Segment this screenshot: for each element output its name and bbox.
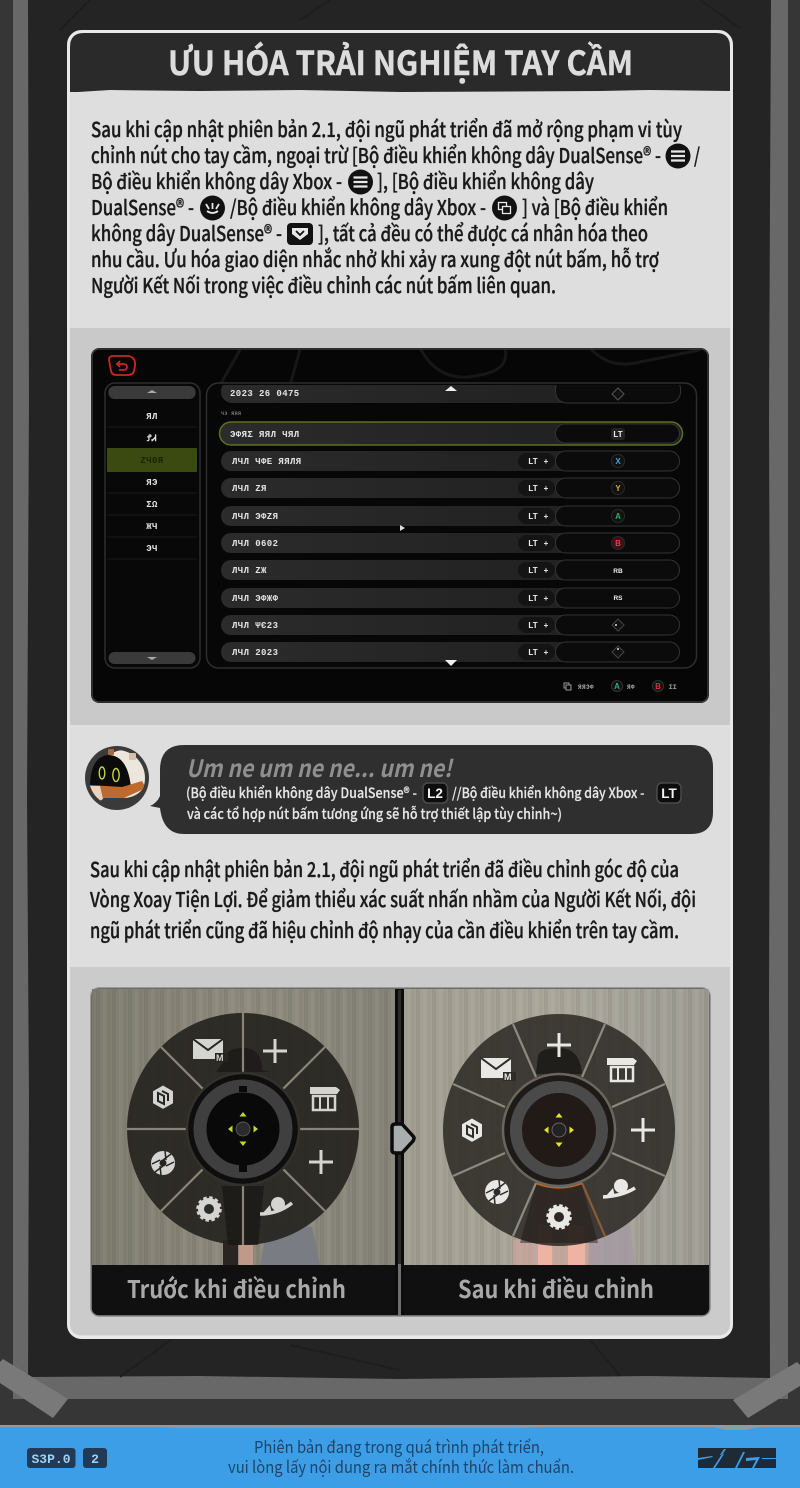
main card — [68, 32, 732, 1338]
icon: view button — [492, 196, 517, 220]
callout: speech bubble: và các tổ hợp nút bấm tương ứng sẽ hỗ trợ thiết lập tùy chỉnh~) — [187, 804, 562, 824]
row RB: RB — [613, 568, 623, 575]
row partially hidden: 2023 26 0475 — [230, 389, 300, 399]
icon: create button — [200, 196, 225, 220]
row dpad up: ЛЧЛ 2023 — [232, 648, 278, 658]
icon: shutter — [485, 1180, 509, 1204]
callout: speech bubble — [150, 745, 713, 834]
icon: back button — [109, 356, 135, 375]
selected row: LT — [613, 430, 623, 439]
left menu — [105, 383, 200, 668]
left menu: ЯЛ — [146, 412, 158, 422]
icon: shutter — [151, 1151, 175, 1175]
intro paragraph: ], [Bộ điều khiển không dây — [377, 165, 594, 195]
icon: touchpad button — [287, 223, 313, 245]
caption: after: Sau khi điều chỉnh — [458, 1270, 654, 1305]
panel: screenshot section — [70, 328, 730, 725]
intro paragraph: / — [694, 139, 700, 169]
disclaimer: vui lòng lấy nội dung ra mắt chính thức làm chuẩn. — [228, 1454, 574, 1478]
row A: A — [615, 512, 621, 521]
row dpad left — [221, 615, 680, 635]
row X: ЛЧЛ ЧФЕ ЯЯЛЯ — [232, 457, 302, 467]
intro paragraph — [91, 113, 700, 299]
left menu: ЯЭ — [146, 478, 158, 488]
row X: X — [615, 457, 621, 466]
icon: gear — [198, 1198, 220, 1220]
row A — [221, 506, 680, 526]
intro paragraph: nhu cầu. Ưu hóa giao diện nhắc nhở khi xảy ra xung đột nút bấm, hỗ trợ — [91, 243, 659, 273]
arrow: scroll up — [445, 386, 457, 391]
logo: ZZZ — [698, 1448, 776, 1468]
footer hints: B — [655, 682, 661, 691]
icon: mail: M — [216, 1053, 224, 1063]
footer hints: ΣΣ — [669, 684, 677, 691]
selected row: ЭФЯΣ ЯЯЛ ЧЯЛ — [230, 430, 300, 440]
icon: options button — [666, 144, 690, 168]
row B: LT — [528, 539, 538, 548]
icon: LT chip — [657, 783, 681, 803]
icon: store — [310, 1087, 340, 1110]
row X: LT — [528, 457, 538, 466]
left menu: ꝬᏗ — [146, 433, 157, 444]
wheel: before — [92, 989, 396, 1265]
binding list — [206, 378, 696, 668]
row dpad up: + — [544, 648, 549, 657]
screenshot: controller settings — [91, 348, 709, 703]
disclaimer: Phiên bản đang trong quá trình phát triển, — [254, 1434, 544, 1458]
icon: plus — [547, 1033, 571, 1057]
wheel: after — [404, 989, 709, 1265]
row Y: + — [544, 484, 549, 493]
icon: LT chip: LT — [661, 786, 677, 801]
icon: store — [607, 1058, 637, 1081]
row B: B — [615, 539, 621, 548]
row RS: + — [544, 594, 549, 603]
footer hints — [564, 680, 677, 692]
icon: plus — [309, 1150, 333, 1174]
footer band — [0, 1425, 800, 1488]
divider — [395, 989, 404, 1315]
row B: ЛЧЛ 0602 — [232, 539, 278, 549]
badge: version — [27, 1448, 76, 1468]
icon: L2 chip — [423, 783, 448, 803]
row RS — [221, 588, 680, 608]
header bar — [70, 33, 730, 92]
footer hints: ЯЯЭФ — [578, 684, 594, 691]
row B: + — [544, 539, 549, 548]
corner tape right — [733, 1362, 800, 1418]
badge: number: 2 — [91, 1452, 99, 1467]
icon: mail — [481, 1058, 516, 1082]
icon: hexagon — [462, 1118, 482, 1142]
intro paragraph: Sau khi cập nhật phiên bản 2.1, đội ngũ phát triển đã mở rộng phạm vi tùy — [91, 113, 682, 143]
row X — [221, 451, 680, 471]
row RS: ЛЧЛ ЭФЖФ — [232, 594, 279, 604]
callout: speech bubble: (Bộ điều khiển không dây DualSense® - — [186, 783, 417, 803]
selected row — [220, 422, 682, 445]
row B — [221, 533, 680, 553]
row RB: LT — [528, 566, 538, 575]
icon: menu button — [348, 170, 373, 194]
disclaimer — [228, 1434, 574, 1478]
arrow: before to after — [392, 1124, 414, 1153]
row dpad up: LT — [528, 648, 538, 657]
title: ƯU HÓA TRẢI NGHIỆM TAY CẦM — [168, 37, 633, 85]
intro paragraph: không dây DualSense® - — [91, 217, 282, 247]
badge: version: S3P.0 — [32, 1452, 71, 1467]
icon: mail: M — [504, 1072, 512, 1082]
left menu: ЭЧ — [146, 544, 158, 554]
row dpad up — [221, 642, 680, 662]
row RB: ЛЧЛ ZЖ — [232, 566, 267, 576]
intro paragraph: DualSense® - — [91, 191, 194, 221]
icon: planet — [603, 1179, 635, 1197]
row partially hidden — [221, 385, 681, 404]
row X: + — [544, 457, 549, 466]
row dpad left: ЛЧЛ ΨЄ23 — [232, 621, 278, 631]
row dpad left: + — [544, 621, 549, 630]
row A: ЛЧЛ ЭФZЯ — [232, 512, 278, 522]
second paragraph: ngũ phát triển cũng đã hiệu chỉnh độ nhạy của cần điều khiển trên tay cầm. — [90, 914, 679, 944]
row RB — [221, 560, 680, 580]
icon: mail — [193, 1038, 223, 1061]
row Y: Y — [615, 484, 621, 493]
row Y: LT — [528, 484, 538, 493]
icon: planet — [260, 1197, 292, 1214]
row RS: RS — [613, 595, 623, 602]
caption: before: Trước khi điều chỉnh — [127, 1270, 346, 1305]
intro paragraph: ] và [Bộ điều khiển — [522, 191, 668, 221]
icon: gear — [548, 1206, 570, 1228]
panel: before and after comparison — [70, 967, 730, 1335]
left menu: ZЧ0Я — [140, 456, 164, 466]
avatar — [85, 746, 149, 810]
row RS: LT — [528, 594, 538, 603]
row RB: + — [544, 566, 549, 575]
second paragraph — [89, 853, 696, 944]
row Y: ЛЧЛ ZЯ — [232, 484, 267, 494]
footer hints: A — [614, 682, 620, 691]
icon: plus — [263, 1039, 287, 1063]
arrow: scroll down — [445, 660, 457, 666]
icon: hexagon — [153, 1086, 173, 1109]
row Y — [221, 478, 680, 498]
icon: plus — [631, 1118, 655, 1142]
second paragraph: Sau khi cập nhật phiên bản 2.1, đội ngũ phát triển đã điều chỉnh góc độ của — [90, 853, 679, 883]
row dpad left: LT — [528, 621, 538, 630]
callout: speech bubble: Um ne um ne ne... um ne! — [186, 749, 454, 784]
intro paragraph: /Bộ điều khiển không dây Xbox - — [230, 191, 486, 221]
callout: speech bubble: //Bộ điều khiển không dây Xbox - — [452, 783, 644, 803]
badge: number — [83, 1448, 107, 1468]
intro paragraph: ], tất cả đều có thể được cá nhân hóa theo — [318, 217, 648, 247]
intro paragraph: Bộ điều khiển không dây Xbox - — [91, 165, 342, 195]
row A: + — [544, 512, 549, 521]
cursor — [400, 525, 405, 531]
intro paragraph: chỉnh nút cho tay cầm, ngoại trừ [Bộ điều khiển không dây DualSense® - — [91, 139, 661, 169]
left menu: ΣΩ — [146, 500, 158, 510]
row A: LT — [528, 512, 538, 521]
intro paragraph: Người Kết Nối trong việc điều chỉnh các nút bấm liên quan. — [91, 269, 556, 299]
footer hints: ЯФ — [627, 684, 635, 691]
icon: L2 chip: L2 — [427, 786, 443, 801]
corner tape left — [0, 1359, 68, 1418]
left menu: ЖЧ — [146, 522, 158, 532]
binding list: ЧЭ ЯЯЯ — [221, 411, 241, 417]
